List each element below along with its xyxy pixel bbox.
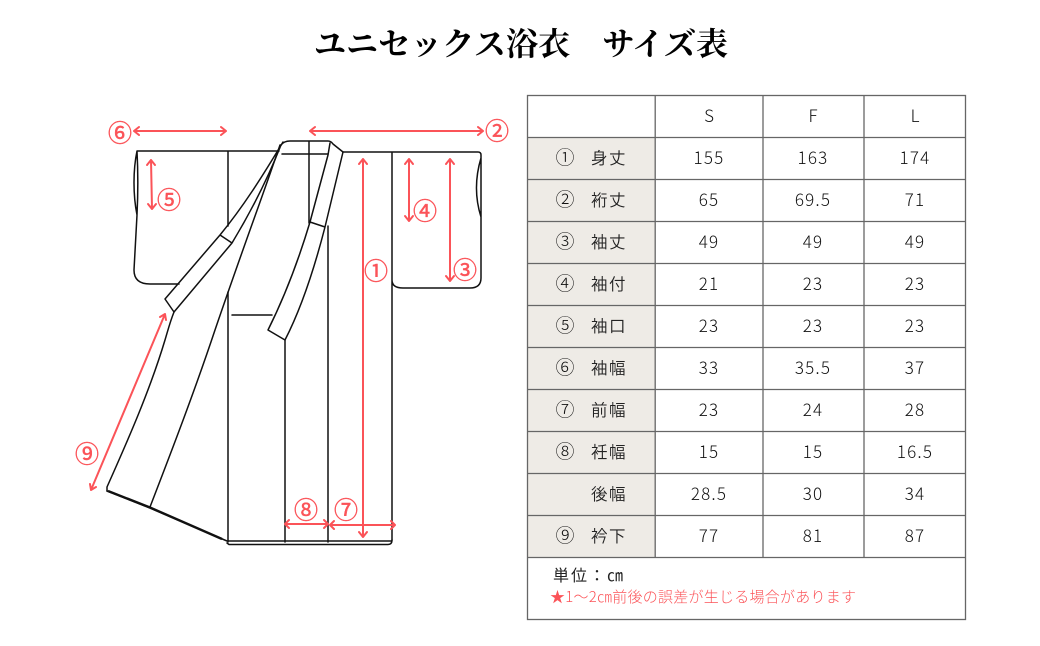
- row 7: 24: [803, 396, 823, 421]
- row 8: ⑧: [555, 437, 575, 464]
- row 9: 衿下: [591, 523, 627, 547]
- row 3: ③: [555, 227, 575, 254]
- row 5: 袖口: [591, 313, 627, 337]
- row 4: [555, 269, 925, 296]
- row 5: ⑤: [555, 311, 575, 338]
- row 7: 前幅: [591, 397, 627, 421]
- row 9: 87: [905, 522, 925, 547]
- row 1: 174: [900, 144, 930, 169]
- measure 7: front width: [330, 490, 395, 529]
- measure 8: gusset width: ⑧: [294, 490, 318, 526]
- row 9: [555, 521, 925, 548]
- measure 2: yuki length: [310, 112, 509, 146]
- row 3: 49: [803, 228, 823, 253]
- row 8: 15: [699, 438, 719, 463]
- row 3: [555, 227, 925, 254]
- header row: [704, 102, 920, 127]
- header row: F: [808, 102, 818, 127]
- measure 1: body length: [359, 159, 388, 537]
- label column background: [527, 137, 655, 557]
- row 2: ②: [555, 185, 575, 212]
- measure 7: front width: ⑦: [334, 490, 358, 526]
- measure 1: body length: ①: [364, 252, 388, 286]
- row 2: 69.5: [795, 186, 831, 211]
- row 6: ⑥: [555, 353, 575, 380]
- row 4: 袖付: [591, 271, 627, 295]
- measure 9: below collar: ⑨: [75, 434, 99, 470]
- row 1: [555, 143, 930, 170]
- row 6: 袖幅: [591, 355, 627, 379]
- row 8: 15: [803, 438, 823, 463]
- row back width: 28.5: [691, 480, 727, 505]
- row 5: 23: [803, 312, 823, 337]
- left sleeve: [134, 151, 279, 284]
- row back width: 後幅: [591, 481, 627, 505]
- row 4: 21: [699, 270, 719, 295]
- header row: L: [911, 102, 920, 127]
- row 3: 49: [699, 228, 719, 253]
- row 1: ①: [555, 143, 575, 170]
- row 2: 71: [905, 186, 925, 211]
- row 9: ⑨: [555, 521, 575, 548]
- yukata garment diagram: [107, 141, 481, 544]
- row 5: 23: [699, 312, 719, 337]
- row 6: [555, 353, 925, 380]
- row 6: 37: [905, 354, 925, 379]
- row 4: 23: [905, 270, 925, 295]
- measure 9: below collar: [75, 314, 166, 490]
- row 1: 163: [798, 144, 828, 169]
- measure 6: sleeve width: [108, 114, 226, 148]
- row 2: [555, 185, 925, 212]
- row 8: 16.5: [897, 438, 933, 463]
- measure 3: sleeve length: ③: [453, 250, 477, 286]
- right collar band: [268, 143, 343, 340]
- row 8: 衽幅: [591, 439, 627, 463]
- row 1: 身丈: [591, 145, 627, 169]
- overlapping front panel lines: [150, 145, 280, 507]
- measure 6: sleeve width: ⑥: [108, 114, 132, 148]
- left collar band: [165, 142, 283, 312]
- row 7: ⑦: [555, 395, 575, 422]
- centre seams: [228, 226, 328, 542]
- tolerance note: ★1～2㎝前後の誤差が生じる場合があります: [550, 586, 856, 607]
- row 3: 袖丈: [591, 229, 627, 253]
- measure 4: sleeve attachment: [405, 159, 437, 226]
- row 7: [555, 395, 925, 422]
- row 8: [555, 437, 933, 464]
- measure 2: yuki length: ②: [485, 112, 509, 146]
- unit note: 単位：㎝: [553, 562, 623, 586]
- header row: S: [704, 102, 714, 127]
- row 6: 33: [699, 354, 719, 379]
- row 4: 23: [803, 270, 823, 295]
- measurement arrows and numbers: [75, 112, 509, 537]
- row 6: 35.5: [795, 354, 831, 379]
- row 7: 23: [699, 396, 719, 421]
- row 7: 28: [905, 396, 925, 421]
- row 5: [555, 311, 925, 338]
- right shoulder and sleeve: [343, 152, 481, 540]
- table grid: [527, 95, 966, 620]
- row back width: 34: [905, 480, 925, 505]
- measure 5: cuff opening: ⑤: [157, 180, 181, 216]
- row 5: 23: [905, 312, 925, 337]
- hem: [107, 491, 392, 544]
- row back width: 30: [803, 480, 823, 505]
- measure 4: sleeve attachment: ④: [413, 192, 437, 226]
- neck collar top: [281, 141, 343, 223]
- row 9: 77: [699, 522, 719, 547]
- measure 3: sleeve length: [446, 159, 477, 286]
- row 9: 81: [803, 522, 823, 547]
- row 2: 裄丈: [591, 187, 627, 211]
- size table: [527, 95, 966, 620]
- row 3: 49: [905, 228, 925, 253]
- row 2: 65: [699, 186, 719, 211]
- row back width: [591, 480, 925, 505]
- row 1: 155: [694, 144, 724, 169]
- measure 8: gusset width: [285, 490, 328, 528]
- measure 5: cuff opening: [147, 160, 181, 216]
- row 4: ④: [555, 269, 575, 296]
- title: ユニセックス浴衣 サイズ表: [314, 26, 728, 62]
